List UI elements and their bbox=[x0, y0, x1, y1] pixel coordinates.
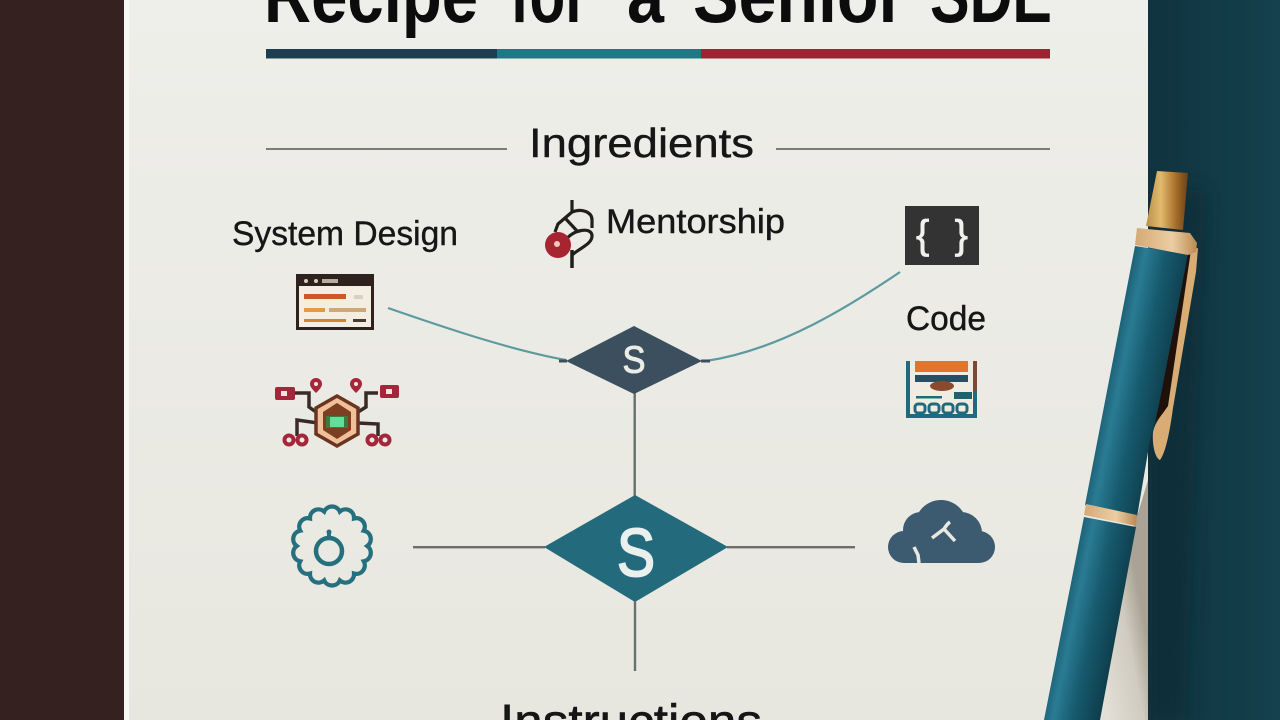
connector: top to bottom diamond bbox=[634, 392, 636, 496]
icon: code braces bbox=[905, 206, 979, 265]
label: Code: Code bbox=[906, 300, 986, 338]
connector: browser to top diamond bbox=[388, 308, 566, 360]
icon: code dashboard bbox=[906, 361, 977, 418]
pen clip dark inner bbox=[1155, 254, 1193, 422]
title bbox=[264, 0, 1052, 39]
connector: code to top diamond bbox=[706, 272, 900, 361]
pen clip bbox=[1153, 248, 1198, 460]
pen bbox=[1044, 171, 1205, 720]
icon: teal gear ring bbox=[293, 506, 371, 586]
pen band bbox=[1084, 504, 1137, 526]
icon: network hexagon bbox=[275, 378, 399, 446]
diamond: bottom S bbox=[544, 495, 728, 602]
pen body upper bbox=[1085, 246, 1188, 517]
connector: bottom vertical bbox=[634, 601, 636, 671]
icon: cloud bbox=[888, 500, 995, 563]
label and icon: Mentorship bbox=[545, 200, 785, 268]
diamond: top S: S bbox=[622, 340, 646, 382]
pen body lower bbox=[1044, 517, 1136, 720]
panel: recipe paper bbox=[124, 0, 1148, 720]
label: Mentorship: Mentorship bbox=[606, 203, 785, 241]
pen shadow bbox=[1160, 194, 1200, 712]
heading: Ingredients: Ingredients bbox=[529, 120, 754, 166]
icon: mentorship knot bbox=[545, 200, 592, 268]
label: System Design: System Design bbox=[232, 215, 458, 253]
diamond: bottom S: S bbox=[617, 515, 655, 591]
background: teal right bbox=[1148, 0, 1280, 720]
title tricolor bar bbox=[266, 49, 1050, 58]
background: dark wood left bbox=[0, 0, 124, 720]
pen cap: gold bbox=[1146, 171, 1188, 230]
connector: left horizontal bbox=[413, 546, 545, 548]
icon: code braces: { } bbox=[916, 213, 968, 257]
pen collar bbox=[1135, 228, 1197, 255]
connector: right horizontal bbox=[727, 546, 855, 548]
diamond: top S bbox=[559, 326, 710, 394]
icon: browser window bbox=[296, 274, 374, 330]
